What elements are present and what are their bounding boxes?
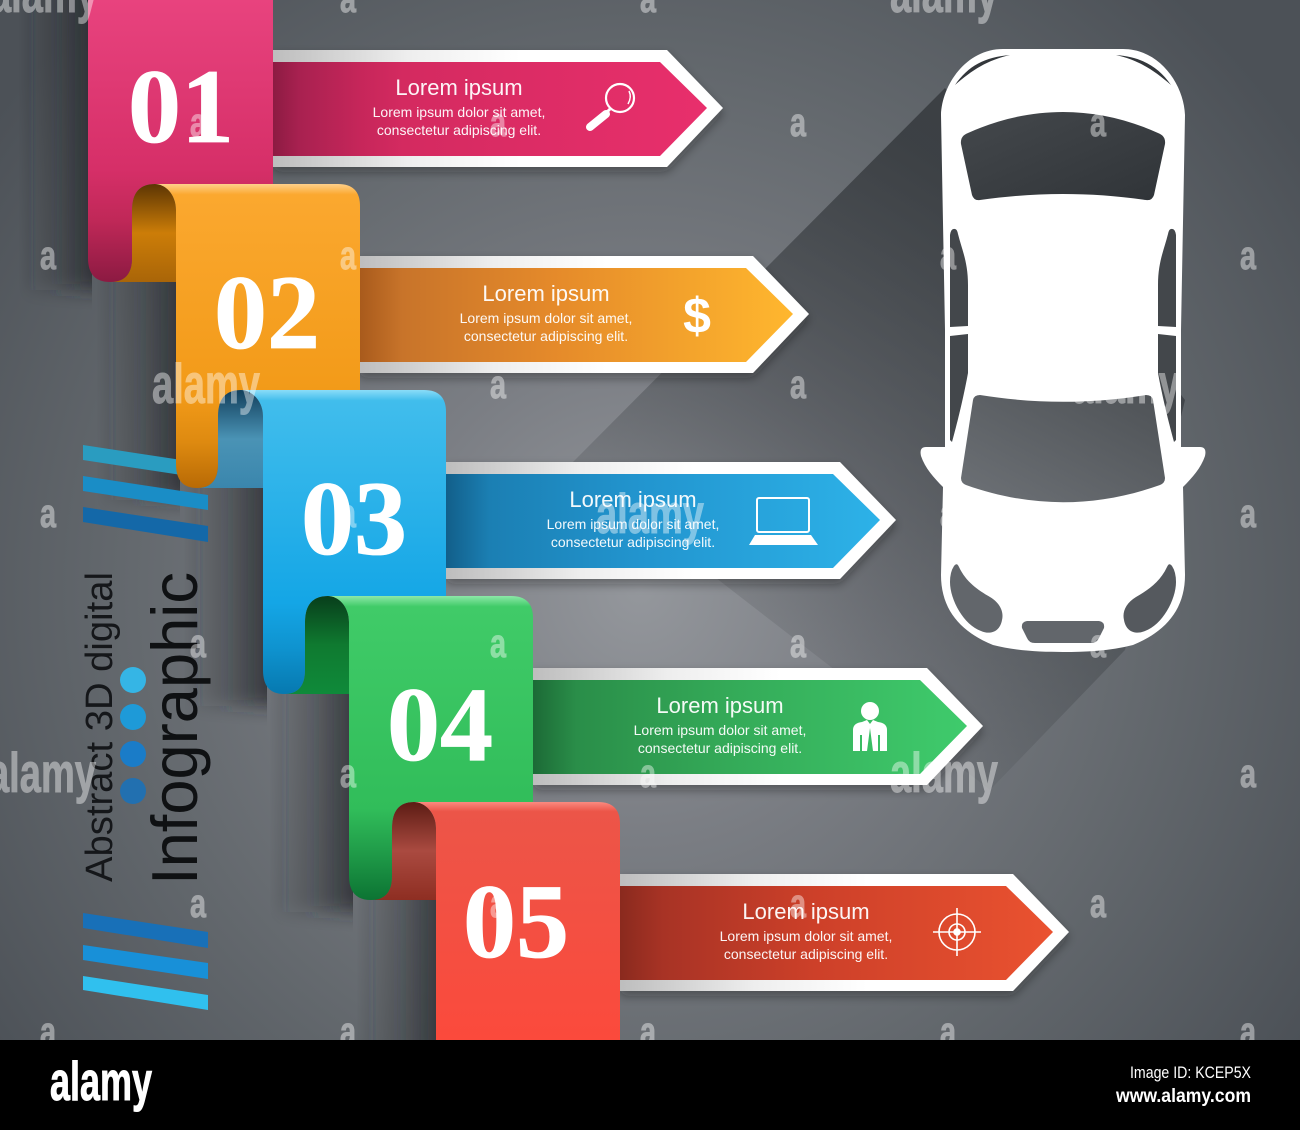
watermark pattern: a bbox=[40, 1010, 57, 1054]
arrow 1: Lorem ipsum dolor sit amet, bbox=[373, 104, 545, 120]
icon: dollar: $ bbox=[683, 288, 711, 344]
arrow 2: Lorem ipsum dolor sit amet, bbox=[460, 310, 632, 326]
ribbon 3 bbox=[241, 390, 446, 694]
vertical title: Infographic bbox=[138, 572, 211, 885]
number 03: 03 bbox=[301, 460, 407, 577]
rear window bbox=[961, 112, 1165, 200]
right headlight bbox=[1124, 564, 1176, 633]
arrow 4: Lorem ipsum dolor sit amet, bbox=[634, 722, 806, 738]
watermark pattern: a bbox=[940, 492, 957, 536]
watermark pattern: a bbox=[790, 882, 807, 926]
ribbon 2 fold bbox=[110, 184, 176, 282]
icon: laptop bbox=[749, 498, 818, 545]
windshield bbox=[961, 395, 1165, 502]
ribbon 4 bbox=[328, 596, 533, 900]
watermark pattern: a bbox=[790, 363, 807, 407]
arrow 1 bbox=[273, 50, 723, 167]
watermark pattern: a bbox=[340, 492, 357, 536]
arrow 4: Lorem ipsum bbox=[656, 693, 784, 718]
car long shadow bbox=[570, 88, 1185, 790]
arrow 2 bbox=[359, 256, 809, 373]
watermark pattern: a bbox=[940, 234, 957, 278]
watermark pattern: a bbox=[490, 101, 507, 145]
watermark pattern: a bbox=[940, 1010, 957, 1054]
watermark pattern: a bbox=[490, 622, 507, 666]
ribbon 3 fold bbox=[197, 390, 263, 488]
watermark pattern: a bbox=[1090, 622, 1107, 666]
ribbon 5 bbox=[414, 802, 620, 1040]
bottom stripes bbox=[83, 913, 208, 1010]
watermark pattern: a bbox=[40, 234, 57, 278]
watermark pattern: alamy bbox=[890, 741, 998, 804]
icon: person bbox=[853, 702, 887, 751]
arrow 3: Lorem ipsum bbox=[569, 487, 697, 512]
watermark pattern: a bbox=[1240, 752, 1257, 796]
watermark pattern: a bbox=[190, 882, 207, 926]
footer band bbox=[0, 1040, 1300, 1130]
website: www.alamy.com bbox=[1115, 1086, 1251, 1107]
arrow 4: consectetur adipiscing elit. bbox=[638, 740, 802, 756]
watermark pattern: a bbox=[790, 622, 807, 666]
watermark pattern: alamy bbox=[596, 482, 704, 545]
car body bbox=[921, 49, 1205, 652]
number 05: 05 bbox=[463, 863, 569, 980]
watermark pattern: a bbox=[1240, 1010, 1257, 1054]
watermark pattern: a bbox=[340, 234, 357, 278]
arrow 1: consectetur adipiscing elit. bbox=[377, 122, 541, 138]
watermark pattern: alamy bbox=[152, 352, 260, 415]
car bbox=[921, 49, 1205, 652]
arrow 5: Lorem ipsum dolor sit amet, bbox=[720, 928, 892, 944]
watermark pattern: a bbox=[490, 882, 507, 926]
side windows bbox=[950, 229, 1176, 442]
watermark pattern: a bbox=[1240, 234, 1257, 278]
arrow 3: consectetur adipiscing elit. bbox=[551, 534, 715, 550]
watermark pattern: alamy bbox=[1072, 352, 1180, 415]
ribbon 5 fold bbox=[370, 802, 436, 900]
number 04: 04 bbox=[387, 666, 493, 783]
top stripes bbox=[83, 445, 208, 542]
arrow 1: Lorem ipsum bbox=[395, 75, 523, 100]
icon: target bbox=[933, 908, 981, 956]
arrow 4 bbox=[533, 668, 983, 785]
title block bbox=[79, 445, 211, 1010]
grille bbox=[1022, 621, 1104, 643]
watermark pattern: a bbox=[1240, 492, 1257, 536]
arrow 2: consectetur adipiscing elit. bbox=[464, 328, 628, 344]
ribbon 4 fold bbox=[284, 596, 349, 694]
number 02: 02 bbox=[214, 254, 320, 371]
watermark pattern: a bbox=[640, 1010, 657, 1054]
watermark pattern: a bbox=[1090, 882, 1107, 926]
watermark pattern: a bbox=[1090, 101, 1107, 145]
watermark pattern: a bbox=[190, 101, 207, 145]
number 01: 01 bbox=[128, 48, 234, 165]
arrow 2: Lorem ipsum bbox=[482, 281, 610, 306]
left headlight bbox=[950, 564, 1002, 633]
watermark pattern: a bbox=[340, 1010, 357, 1054]
arrow 5: Lorem ipsum bbox=[742, 899, 870, 924]
dots bbox=[120, 667, 146, 804]
watermark pattern: a bbox=[190, 622, 207, 666]
icon: magnifier bbox=[590, 84, 634, 127]
ribbon 2 bbox=[155, 184, 360, 488]
vertical subtitle: Abstract 3D digital bbox=[79, 572, 121, 882]
watermark pattern: a bbox=[640, 752, 657, 796]
arrow 5: consectetur adipiscing elit. bbox=[724, 946, 888, 962]
watermark pattern: a bbox=[790, 101, 807, 145]
ribbon 1 bbox=[88, 0, 273, 282]
arrow 3: Lorem ipsum dolor sit amet, bbox=[547, 516, 719, 532]
image id: Image ID: KCEP5X bbox=[1130, 1063, 1251, 1082]
ribbon cast shadows bbox=[18, 0, 440, 1058]
watermark pattern: a bbox=[40, 492, 57, 536]
rear slits bbox=[955, 55, 1171, 85]
watermark pattern: a bbox=[490, 363, 507, 407]
arrow 5 bbox=[620, 874, 1069, 991]
footer logo: alamy bbox=[50, 1050, 152, 1112]
watermark pattern: a bbox=[340, 752, 357, 796]
arrow 3 bbox=[446, 462, 896, 579]
